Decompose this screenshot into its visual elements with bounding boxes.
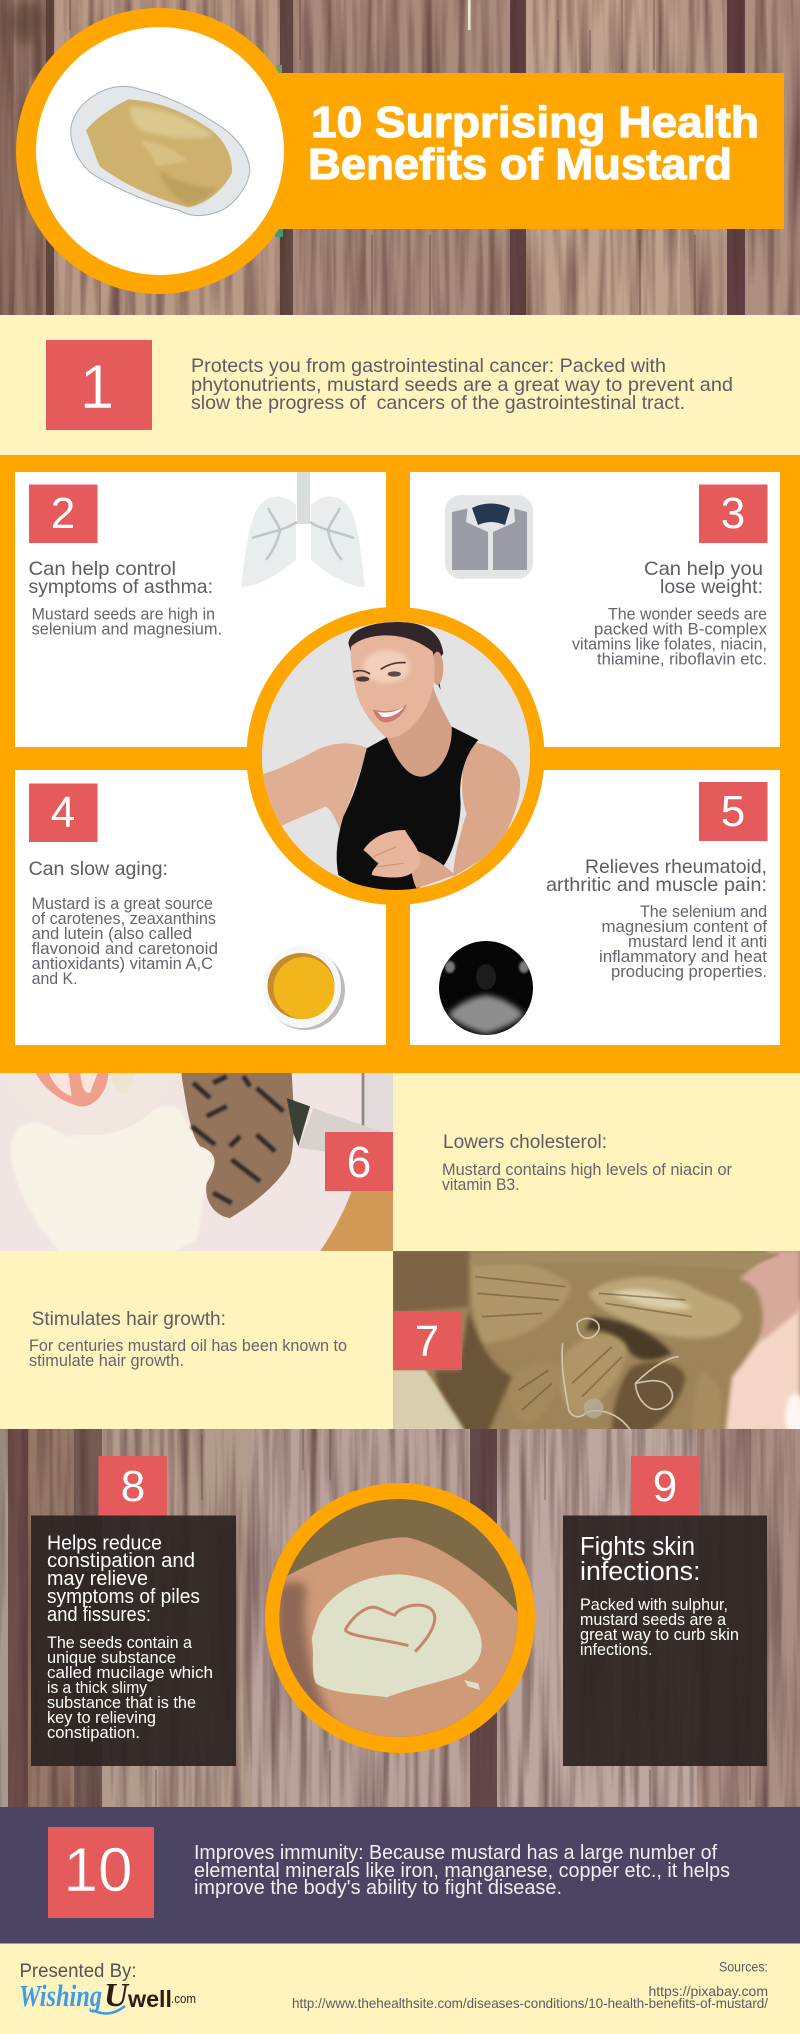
badge 5 <box>699 782 768 841</box>
badge 2 <box>29 484 98 543</box>
photo: braided hair <box>392 1250 800 1440</box>
text: item 7: For centuries mustard oil has been known to <box>29 1336 347 1355</box>
text: item 9 <box>580 1595 739 1659</box>
text: sources <box>292 1958 768 2011</box>
eyes <box>353 663 406 674</box>
heading: item 8: and fissures: <box>47 1603 151 1626</box>
badge 8: 8 <box>121 1462 145 1511</box>
left arm <box>260 743 368 830</box>
text: item 9: mustard seeds are a <box>580 1610 727 1629</box>
text: item 8: constipation. <box>47 1723 140 1742</box>
text: item 3 <box>572 606 768 668</box>
text: item 1: Protects you from gastrointestinal cancer: Packed with <box>191 355 666 377</box>
icon: lungs <box>241 472 365 587</box>
text: sources: https://pixabay.com <box>648 1983 768 1999</box>
text: item 5 <box>599 903 767 981</box>
smile <box>373 704 407 722</box>
panel: item 1 band <box>0 315 800 455</box>
heading: item 5: arthritic and muscle pain: <box>546 874 767 896</box>
background: lower wood panel <box>0 1429 800 1807</box>
text: item 10 <box>194 1841 730 1899</box>
icon: bowl of mustard oil <box>263 946 345 1030</box>
heading: item 9 <box>580 1533 700 1586</box>
text: sources: http://www.thehealthsite.com/diseases-conditions/10-health-benefits-of-mustard/ <box>292 1995 768 2011</box>
text: item 10: Improves immunity: Because mustard has a large number of <box>194 1841 717 1864</box>
panel: item 3 weight <box>410 472 780 747</box>
badge 6 <box>325 1132 393 1191</box>
heading: item 9: infections: <box>580 1558 700 1586</box>
text: item 4 <box>32 895 218 988</box>
logo: WishingUwell.com: well <box>127 1986 172 2012</box>
text: item 1 <box>191 355 733 414</box>
panel: item 5 pain <box>410 770 780 1045</box>
text: item 3: thiamine, riboflavin etc. <box>597 650 767 668</box>
heading: item 9: Fights skin <box>580 1533 695 1561</box>
text: item 9: infections. <box>580 1640 652 1659</box>
text: item 4: of carotenes, zeaxanthins <box>32 910 216 928</box>
text: item 5: The selenium and <box>640 903 767 921</box>
photo: steak and eggs plate <box>0 1073 393 1251</box>
title text: Benefits of Mustard <box>308 140 732 189</box>
badge 2: 2 <box>51 489 75 538</box>
heading: item 8: constipation and <box>47 1549 195 1572</box>
text: item 9: great way to curb skin <box>580 1625 739 1644</box>
text: item 2: selenium and magnesium. <box>32 620 222 638</box>
heading: item 8: symptoms of piles <box>47 1585 200 1608</box>
panel: item 7 hair <box>0 1250 800 1440</box>
icon: mustard dish <box>71 86 250 216</box>
ear <box>434 652 444 685</box>
text: item 6: Mustard contains high levels of niacin or <box>442 1160 732 1179</box>
badge 7 <box>393 1311 462 1370</box>
badge 1: 1 <box>80 353 114 422</box>
heading: item 8: Helps reduce <box>47 1531 162 1554</box>
text: item 8: is a thick slimy <box>47 1678 147 1697</box>
text: item 5: mustard lend it anti <box>628 933 767 951</box>
panel: orange benefits section <box>0 455 800 1073</box>
logo: WishingUwell.com: .com <box>171 1991 196 2006</box>
text: item 1: slow the progress of cancers of the gastrointestinal tract. <box>191 392 685 414</box>
text: item 10: improve the body's ability to fight disease. <box>194 1876 562 1899</box>
icon: bathroom scale <box>445 495 533 579</box>
panel: item 4 aging <box>15 770 386 1045</box>
text: item 5: inflammatory and heat <box>599 948 767 966</box>
text: item 8: key to relieving <box>47 1708 156 1727</box>
logo: WishingUwell.com: Wishing <box>19 1978 102 2013</box>
heading: item 7: Stimulates hair growth: <box>32 1308 226 1330</box>
text: item 3: The wonder seeds are <box>608 606 767 624</box>
face <box>351 635 435 738</box>
text: presented by: Presented By: <box>20 1961 136 1982</box>
text: item 4: Mustard is a great source <box>32 895 213 913</box>
text: item 7: stimulate hair growth. <box>29 1351 184 1370</box>
text: item 9: Packed with sulphur, <box>580 1595 728 1614</box>
right arm <box>453 742 520 877</box>
heading: item 3: Can help you <box>644 558 763 580</box>
title banner <box>270 73 784 229</box>
logo: WishingUwell.com: U <box>104 1977 130 2014</box>
badge 9 <box>631 1456 700 1516</box>
heading: item 2: Can help control <box>28 558 176 580</box>
hair <box>348 622 443 690</box>
heading: item 8: may relieve <box>47 1567 148 1590</box>
heading: item 5: Relieves rheumatoid, <box>585 856 767 878</box>
text: item 3: packed with B-complex <box>594 620 768 638</box>
text: item 2 <box>32 606 222 638</box>
photo: mustard paste on skin in orange ring <box>265 1483 535 1753</box>
title text <box>308 98 759 189</box>
icon: green garnish peeking behind header <box>275 65 283 237</box>
heading: item 5 <box>546 856 767 896</box>
text: item 6 <box>442 1160 732 1194</box>
badge 3: 3 <box>721 489 745 538</box>
text: item 8: unique substance <box>47 1648 176 1667</box>
heading: item 3 <box>644 558 763 598</box>
icon: muscular back photo <box>439 941 533 1035</box>
badge 3 <box>699 484 768 543</box>
heading: item 3: lose weight: <box>660 576 763 598</box>
badge 4 <box>29 784 98 842</box>
text: item 8: called mucilage which <box>47 1663 213 1682</box>
badge 10 <box>48 1827 154 1918</box>
heading: item 8 <box>47 1531 200 1626</box>
logo: WishingUwell.com <box>19 1977 196 2014</box>
text: item 5: producing properties. <box>611 963 767 981</box>
badge 6: 6 <box>347 1138 371 1187</box>
badge 8 <box>98 1456 167 1516</box>
forearm and hand <box>412 851 454 888</box>
text: item 7 <box>29 1336 347 1370</box>
text: item 3: vitamins like folates, niacin, <box>572 636 767 654</box>
text: item 6: vitamin B3. <box>442 1175 520 1194</box>
text: item 4: antioxidants) vitamin A,C <box>32 955 213 973</box>
heading: item 2 <box>28 558 213 598</box>
text: item 2: Mustard seeds are high in <box>32 606 215 624</box>
badge 7: 7 <box>415 1317 439 1366</box>
neck <box>383 687 453 777</box>
badge 1 <box>46 340 152 430</box>
panel: item 10 immunity <box>0 1807 800 1944</box>
text: item 4: and lutein (also called <box>32 925 192 943</box>
badge 5: 5 <box>721 787 745 836</box>
heading: item 4: Can slow aging: <box>28 858 168 880</box>
tank top <box>337 727 478 892</box>
text: item 1: phytonutrients, mustard seeds are a great way to prevent and <box>191 374 733 396</box>
background: top wood panel <box>0 0 800 315</box>
heading: item 6: Lowers cholesterol: <box>443 1131 607 1153</box>
header circle with mustard dish <box>16 8 302 294</box>
heading: item 2: symptoms of asthma: <box>28 576 213 598</box>
panel: footer <box>0 1944 800 2034</box>
text: item 8: The seeds contain a <box>47 1633 193 1652</box>
title text: 10 Surprising Health <box>311 98 759 147</box>
badge 4: 4 <box>51 788 75 837</box>
text: item 8: substance that is the <box>47 1693 196 1712</box>
text: item 5: magnesium content of <box>602 918 767 936</box>
panel: item 2 asthma <box>15 472 386 747</box>
panel: item 6 cholesterol <box>0 1073 800 1251</box>
badge 10: 10 <box>64 1836 132 1905</box>
text: item 4: flavonoid and caretonoid <box>32 940 218 958</box>
text: item 10: elemental minerals like iron, manganese, copper etc., it helps <box>194 1859 730 1882</box>
text: item 8 <box>47 1633 213 1742</box>
photo: smiling woman in orange ring <box>246 607 544 905</box>
panel: item 9 skin infections <box>563 1456 767 1766</box>
badge 9: 9 <box>653 1462 677 1511</box>
text: item 4: and K. <box>32 970 78 988</box>
panel: item 8 constipation <box>31 1456 236 1766</box>
text: sources: Sources: <box>719 1958 768 1974</box>
